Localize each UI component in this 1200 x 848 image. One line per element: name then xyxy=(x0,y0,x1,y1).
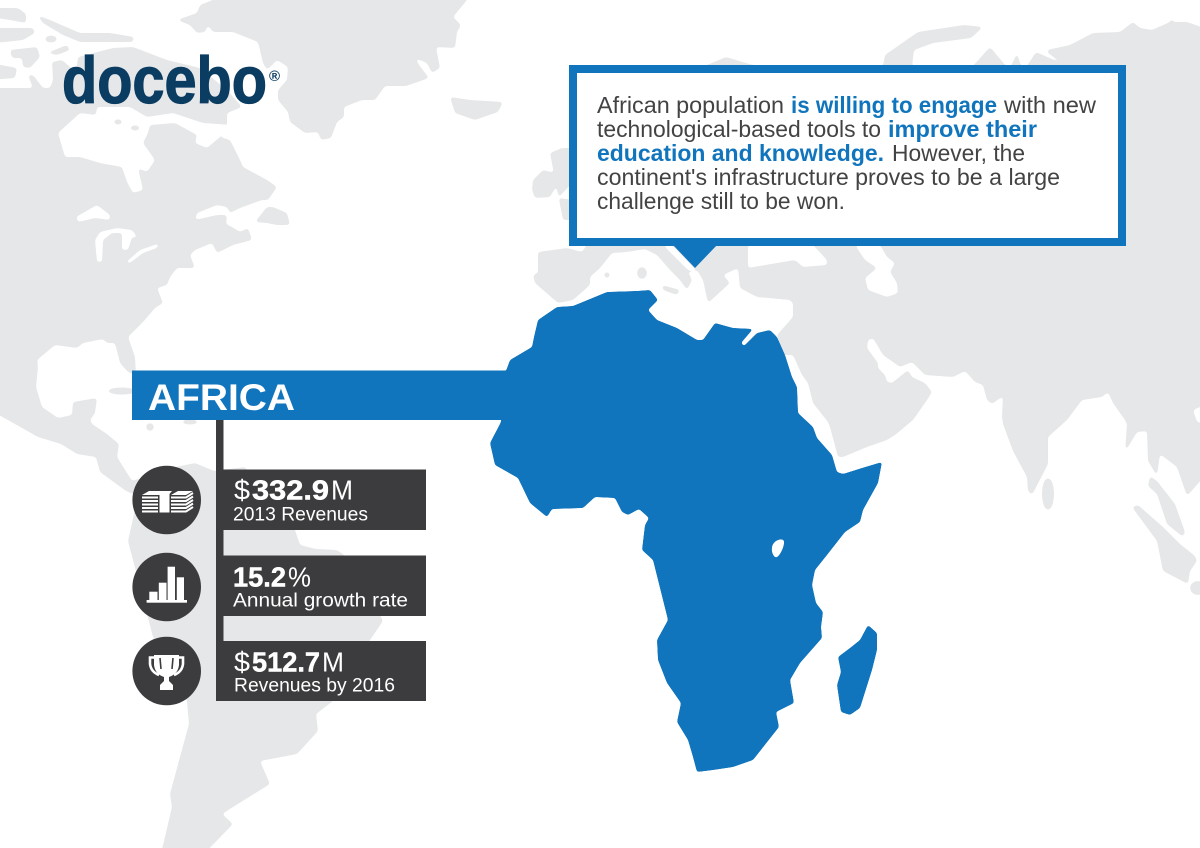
callout text: challenge still to be won. xyxy=(597,188,845,214)
stat: annual growth rate: Annual growth rate xyxy=(233,590,408,612)
callout text: However, the xyxy=(892,140,1025,166)
callout text: with new xyxy=(1003,92,1097,118)
stat: annual growth rate xyxy=(216,556,426,616)
callout text: continent's infrastructure proves to be a large xyxy=(597,164,1060,190)
logo: docebo: ® xyxy=(269,68,280,85)
callout box xyxy=(573,69,1122,242)
icon: trophy xyxy=(132,637,201,705)
callout pointer xyxy=(672,244,718,268)
stat: annual growth rate: 15.2 xyxy=(233,562,286,592)
icon: money stacks xyxy=(132,466,201,534)
stat: revenues by 2016 xyxy=(216,641,426,701)
map of Africa xyxy=(490,290,882,772)
stat: 2013 revenues xyxy=(216,470,426,530)
logo: docebo: docebo xyxy=(62,43,267,117)
callout text: is willing to engage xyxy=(791,92,997,118)
callout text: technological-based tools to xyxy=(597,116,881,142)
banner: AFRICA xyxy=(132,370,510,420)
callout text: improve their xyxy=(888,116,1037,142)
icon: bar chart xyxy=(132,553,201,621)
stat: 2013 revenues: $ xyxy=(234,474,250,506)
stat: revenues by 2016: M xyxy=(322,646,344,678)
callout text: education and knowledge. xyxy=(597,140,884,166)
water cut-outs on the map xyxy=(58,107,1200,425)
callout: African population xyxy=(573,69,1122,268)
callout text: African population xyxy=(597,92,784,118)
stat: revenues by 2016: Revenues by 2016 xyxy=(234,676,395,696)
stat: revenues by 2016: 512.7 xyxy=(252,646,320,678)
stat: 2013 revenues: 332.9 xyxy=(252,474,329,506)
stat: 2013 revenues: 2013 Revenues xyxy=(233,504,368,526)
small islands in Hudson Bay xyxy=(114,120,139,130)
stat: annual growth rate: % xyxy=(288,562,311,592)
connector line xyxy=(216,420,224,701)
banner: AFRICA: AFRICA xyxy=(148,377,295,418)
stat: revenues by 2016: $ xyxy=(234,646,250,678)
Madagascar xyxy=(837,625,877,715)
stat: 2013 revenues: M xyxy=(331,474,353,506)
callout text xyxy=(597,92,1097,214)
